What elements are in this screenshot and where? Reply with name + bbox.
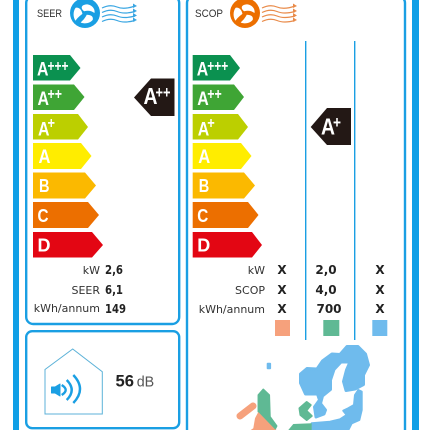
data table: SCOP: SCOP: [235, 284, 265, 297]
rating badge: A+: A: [321, 114, 335, 140]
data table: SCOP: 4,0: [315, 283, 337, 297]
data table: SCOP: X: [277, 263, 287, 277]
data table: SEER: 149: [105, 302, 126, 316]
arrow: D: D: [197, 236, 210, 256]
arrow: A++: [33, 84, 84, 110]
arrow: A: A: [38, 147, 51, 168]
arrow: A+++: [193, 55, 240, 80]
icon: house with speaker: [45, 349, 102, 414]
arrow: C: [193, 202, 258, 228]
arrow: A+: A: [38, 120, 50, 140]
arrow: A++: ++: [48, 86, 62, 103]
arrow: B: [193, 172, 255, 198]
rating badge: A++: A: [144, 83, 158, 109]
arrow: A: A: [198, 147, 210, 168]
rating badge: A++: ++: [156, 83, 171, 102]
climate map of Europe: [240, 346, 368, 430]
label: SCOP: SCOP: [195, 8, 223, 20]
column dividers: [306, 41, 355, 340]
data table: SEER: [34, 263, 126, 316]
arrow: B: B: [199, 176, 209, 196]
data table: SCOP: X: [375, 263, 385, 277]
arrow: C: C: [197, 206, 208, 226]
arrow: C: C: [38, 206, 48, 226]
data table: SCOP: X: [375, 283, 385, 297]
label: SEER: SEER: [37, 8, 62, 20]
data table: SEER: 2,6: [105, 263, 123, 277]
arrow: A++: [193, 84, 244, 110]
arrow: A+: +: [48, 115, 55, 132]
rating badge: A+: +: [333, 113, 341, 132]
noise value: 56: [116, 372, 134, 391]
data table: SCOP: kWh/annum: [199, 303, 265, 316]
data table: SEER: kWh/annum: [34, 302, 100, 315]
energy scale: SCOP: [193, 55, 262, 258]
data table: SEER: 6,1: [105, 283, 123, 297]
arrow: D: [33, 232, 103, 258]
data table: SCOP: kW: [248, 264, 265, 277]
panel: SEER cooling: [26, 0, 179, 324]
arrow: A+++: +++: [48, 58, 68, 75]
arrow: A+: [193, 114, 248, 140]
energy scale: SEER: [33, 55, 103, 258]
panel: SCOP heating: [187, 0, 405, 430]
arrow: B: [33, 172, 96, 198]
rating badge: A+: [311, 108, 351, 145]
arrow: A+++: +++: [207, 58, 228, 75]
panel: noise level: dB: [137, 374, 154, 391]
rating badge: A++: [134, 78, 174, 116]
data table: SCOP: X: [277, 283, 287, 297]
arrow: A++: A: [38, 89, 49, 110]
icon: blue fan with airflow: [70, 0, 137, 28]
arrow: A+++: [33, 55, 80, 80]
left outer bar: [13, 0, 19, 430]
climate zone swatches: [275, 320, 387, 336]
arrow: A+++: A: [37, 60, 49, 80]
arrow: B: B: [39, 176, 50, 196]
right outer bar: [412, 0, 419, 430]
arrow: A+++: A: [197, 60, 208, 80]
data table: SCOP: X: [277, 302, 287, 316]
data table: SEER: SEER: [71, 284, 100, 297]
arrow: A+: +: [207, 115, 215, 132]
data table: SCOP: [199, 263, 385, 316]
arrow: A+: [33, 114, 88, 140]
arrow: A++: A: [197, 89, 209, 110]
arrow: A++: ++: [207, 86, 222, 103]
panel: noise level: [26, 331, 179, 428]
icon: orange fan with airflow: [230, 0, 297, 28]
data table: SCOP: 2,0: [315, 263, 337, 277]
arrow: C: [33, 202, 99, 228]
data table: SCOP: X: [375, 302, 385, 316]
arrow: A+: A: [198, 120, 209, 140]
arrow: A: [193, 143, 252, 169]
arrow: D: [193, 232, 262, 258]
arrow: D: D: [38, 236, 50, 256]
data table: SEER: kW: [83, 264, 100, 277]
data table: SCOP: 700: [316, 302, 342, 316]
arrow: A: [33, 143, 92, 169]
